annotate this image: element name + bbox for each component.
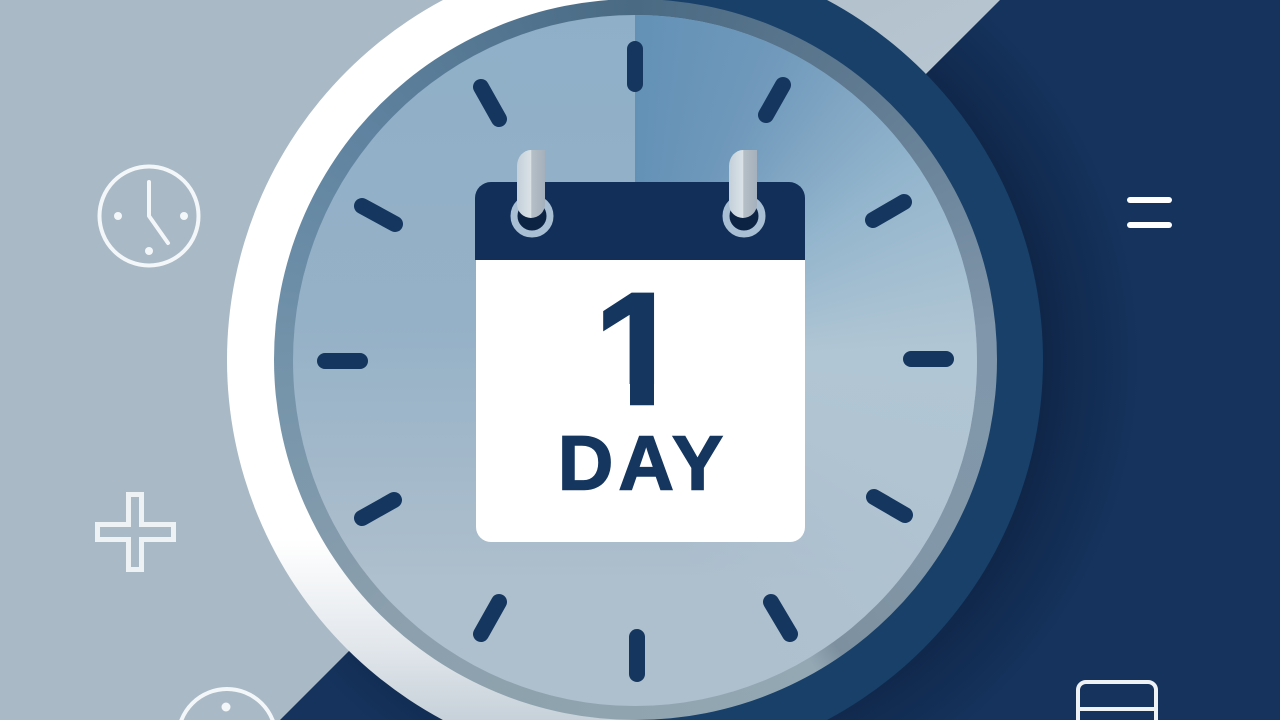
left binder ring xyxy=(514,150,550,234)
clock face xyxy=(293,15,977,706)
calendar xyxy=(475,150,805,542)
icon: partial clock at bottom xyxy=(178,689,276,720)
hour tick marks xyxy=(325,49,946,674)
label DAY: DAY xyxy=(558,420,728,506)
face highlight: upper right shaded quadrant xyxy=(293,15,977,706)
calendar header xyxy=(475,182,805,260)
icon: plus outline xyxy=(98,494,174,570)
clock dial bezel xyxy=(274,0,997,720)
number 1: 1 xyxy=(594,259,682,438)
icon: clock outline xyxy=(100,166,198,266)
icon: menu lines xyxy=(1127,197,1172,228)
icon: table outline xyxy=(1078,682,1156,720)
calendar page xyxy=(476,230,805,542)
right binder ring xyxy=(726,150,762,234)
